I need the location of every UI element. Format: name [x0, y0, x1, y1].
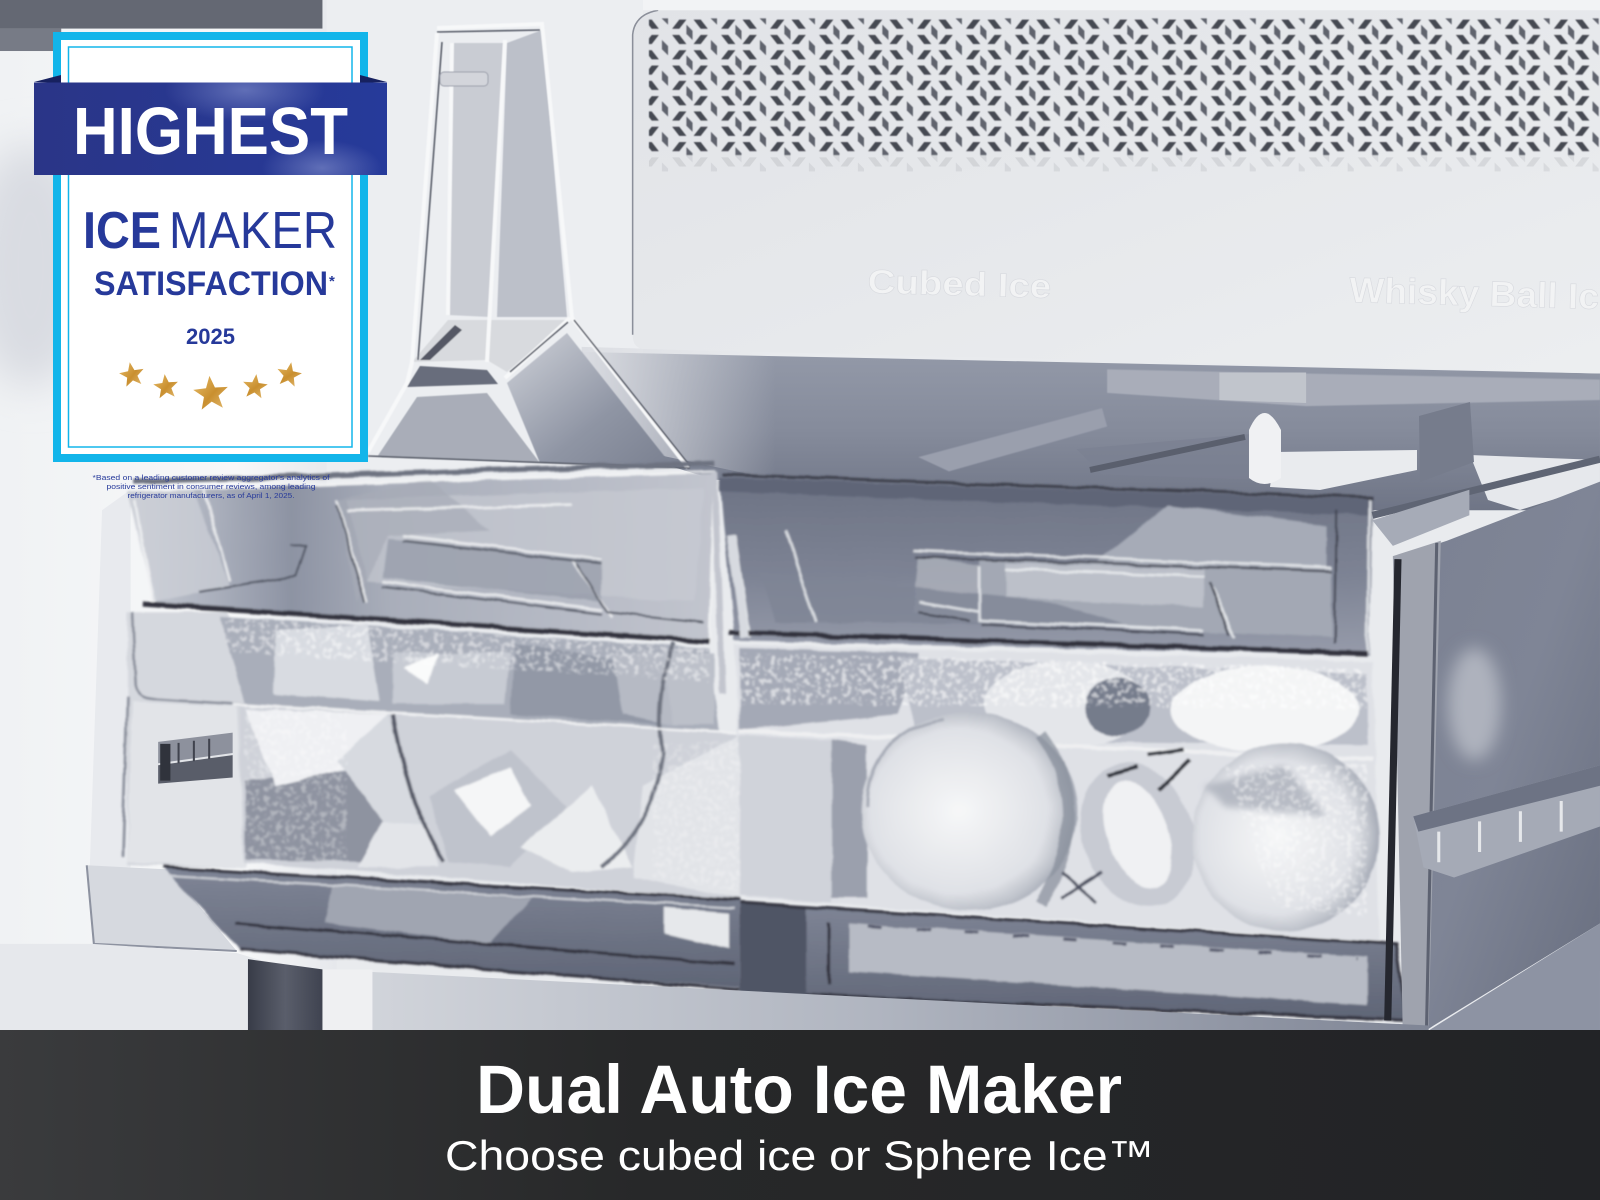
clip bracket [158, 733, 233, 784]
scoop lower left face [377, 393, 540, 463]
cubed ice lower [233, 643, 740, 900]
caption subtitle: Choose cubed ice or Sphere Ice™ [445, 1132, 1154, 1179]
scoop side face [497, 30, 567, 317]
left door surface [0, 0, 337, 1031]
scoop back face [448, 43, 503, 317]
award badge [34, 36, 387, 500]
heading: ICEMAKER: MAKER [169, 202, 337, 260]
footnote: positive sentiment in consumer reviews, among leading [106, 482, 316, 491]
interior wall [327, 0, 643, 490]
caption bar [0, 1030, 1600, 1200]
heading: ICEMAKER: ICE [83, 202, 161, 260]
ghost label: Cubed Ice: Cubed Ice [867, 264, 1052, 306]
ice foam texture [219, 617, 1367, 918]
side handle [1413, 765, 1600, 878]
right side wall [1372, 459, 1600, 1046]
drawer glass and ice contents [122, 463, 1406, 1020]
caption title: Dual Auto Ice Maker [476, 1051, 1122, 1128]
lower left tray [163, 867, 740, 990]
footnote [92, 473, 330, 500]
floor below drawers [0, 944, 1429, 1031]
badge frame [57, 36, 364, 458]
left side panel under bin [122, 612, 306, 867]
year: 2025 [186, 324, 235, 349]
cavity behind drawers [582, 347, 1600, 510]
heading: ICEMAKER [83, 202, 337, 260]
left frame of drawer [87, 490, 237, 951]
upper right bin [714, 471, 1372, 694]
footnote: *Based on a leading customer review aggregator's analytics of [92, 473, 330, 482]
scoop [368, 24, 690, 468]
inner shelf right [980, 559, 1332, 638]
sphere ice balls [861, 712, 1380, 931]
sphere ice compartment [735, 645, 1380, 941]
asterisk: * [329, 273, 335, 290]
ribbon [34, 75, 387, 175]
heading: HIGHEST: HIGHEST [73, 94, 348, 169]
cubed ice upper [219, 616, 719, 733]
heading: SATISFACTION: SATISFACTION [94, 265, 328, 303]
upper left bin [128, 463, 714, 643]
five gold stars [118, 360, 303, 410]
top vent panel [633, 0, 1600, 373]
lower right tray with plate [740, 903, 1406, 1020]
vent perforation pattern [649, 18, 1600, 155]
footnote: refrigerator manufacturers, as of April 1, 2025. [128, 491, 294, 500]
scoop lower right face [507, 333, 673, 467]
white ice maker plate and peg [1090, 402, 1600, 510]
